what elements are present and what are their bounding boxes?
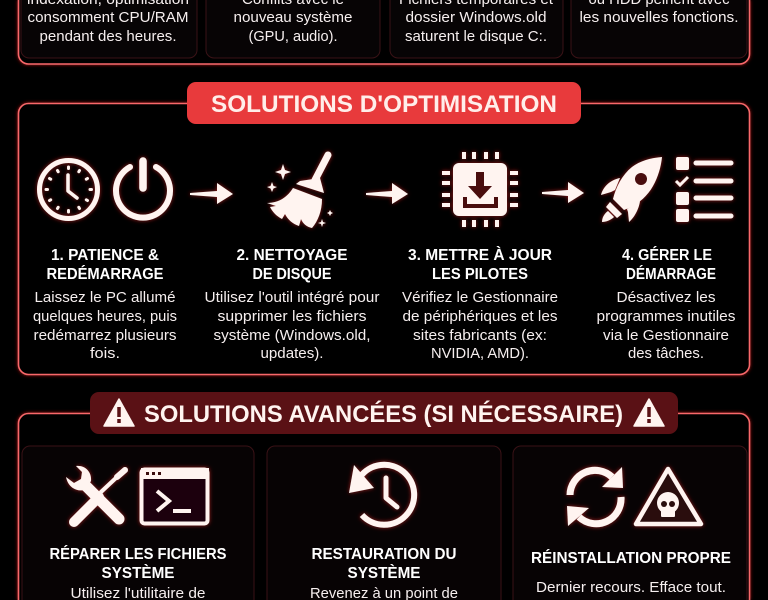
heading: solutions avancées [90,392,678,434]
step 1: quelques heures, puis [33,308,177,325]
text: réparer [50,544,227,600]
step 3: NVIDIA, AMD). [431,345,529,362]
step 4: via le Gestionnaire [603,327,729,344]
step 3: de périphériques et les [402,308,558,325]
step 1: redémarrez plusieurs [34,327,176,344]
panel: causes (cropped top) [18,0,750,64]
step 4: Désactivez les [616,289,716,306]
icon: broom [267,155,333,228]
step 3: LES PILOTES [432,266,528,283]
step 3 [402,245,558,362]
arrow 1 [190,183,233,204]
step 2: updates). [260,345,324,362]
icon: checklist [676,157,731,222]
step 2 [204,247,380,362]
text: réinstallation: RÉINSTALLATION PROPRE [531,548,731,567]
panel: solutions avancées [18,392,750,600]
text: cause 3: dossier Windows.old [406,9,546,26]
text: cause 4: les nouvelles fonctions. [580,9,738,26]
step 1: Laissez le PC allumé [34,289,176,306]
step 4 [596,245,736,362]
card: restauration [267,446,501,600]
icon: refresh [567,467,623,526]
card: réparer [22,446,254,600]
step 1 [33,247,177,362]
heading: solutions avancées: SOLUTIONS AVANCÉES (SI NÉCESSAIRE) [144,400,623,428]
step 4: DÉMARRAGE [626,264,716,283]
step 3: 3. METTRE À JOUR [408,245,552,264]
step 2: Utilisez l'outil intégré pour [204,289,380,306]
icon: chip with download [442,152,518,227]
text: cause 4 [580,0,738,26]
step 2: 2. NETTOYAGE [236,247,348,264]
icon: rocket [601,157,662,222]
step 4: programmes inutiles [596,308,736,325]
text: restauration: RESTAURATION DU [312,546,456,563]
text: cause 2: nouveau système [234,9,352,26]
step 2: DE DISQUE [252,266,332,283]
text: cause 1: pendant des heures. [40,28,176,45]
arrow 2 [366,183,408,204]
text: cause 2: (GPU, audio). [248,28,338,45]
text: cause 2 [234,0,352,45]
icon: clock [40,160,98,218]
text: cause 3 [399,0,554,45]
heading: solutions d'optimisation: SOLUTIONS D'OPTIMISATION [211,91,557,118]
step 3: sites fabricants (ex: [413,327,547,344]
step 4: des tâches. [628,345,704,362]
text: réparer: SYSTÈME [102,563,175,582]
step 1: fois. [90,345,120,362]
icon: power [116,161,170,218]
text: réinstallation [531,548,731,596]
text: cause 1 [27,0,189,45]
arrow 3 [542,182,584,203]
icon: tools [66,466,125,522]
panel: solutions d'optimisation [18,82,750,374]
step 2: système (Windows.old, [214,327,370,344]
text: restauration: SYSTÈME [348,563,421,582]
icon: terminal [141,468,209,524]
step 3: Vérifiez le Gestionnaire [402,289,558,306]
step 1: REDÉMARRAGE [46,264,164,283]
step 1: 1. PATIENCE & [51,247,159,264]
icon: skull warning [636,469,701,524]
step 4: 4. GÉRER LE [622,245,712,264]
card: réinstallation [513,446,747,600]
heading: solutions d'optimisation [187,82,581,124]
step 2: supprimer les fichiers [218,308,366,325]
text: réparer: RÉPARER LES FICHIERS [50,544,227,563]
text: cause 3: saturent le disque C:. [405,28,547,45]
icon: history [349,465,414,525]
text: réinstallation: Dernier recours. Efface tout. [536,579,726,596]
text: cause 1: consomment CPU/RAM [28,9,188,26]
text: restauration [310,546,458,600]
